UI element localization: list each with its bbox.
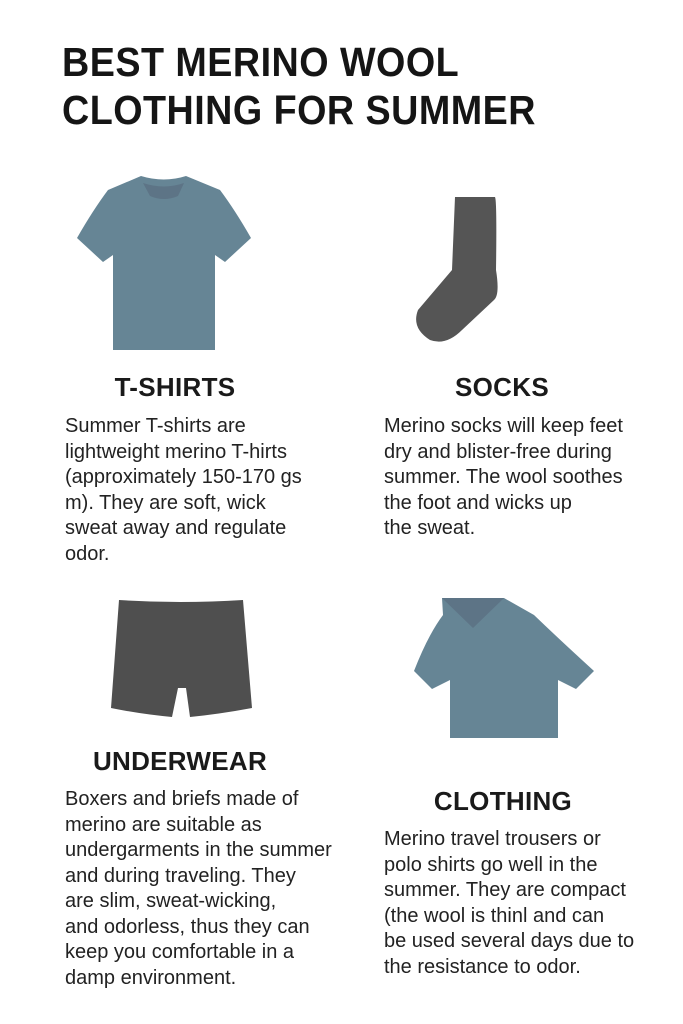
text: t-shirts: Summer T-shirts are: [65, 415, 246, 437]
text: t-shirts: m). They are soft, wick: [65, 492, 266, 514]
text: clothing: [384, 828, 634, 978]
text: socks: dry and blister-free during: [384, 440, 612, 462]
title: BEST MERINO WOOL: [62, 39, 459, 85]
heading: clothing: CLOTHING: [434, 786, 572, 816]
text: t-shirts: sweat away and regulate: [65, 517, 286, 539]
text: clothing: summer. They are compact: [384, 879, 626, 901]
icon: underwear: [111, 600, 252, 717]
text: underwear: undergarments in the summer: [65, 839, 332, 861]
text: clothing: polo shirts go well in the: [384, 854, 597, 876]
heading: t-shirts: T-SHIRTS: [115, 372, 235, 402]
text: socks: summer. The wool soothes: [384, 466, 623, 488]
text: socks: the foot and wicks up: [384, 492, 572, 514]
text: t-shirts: lightweight merino T-hirts: [65, 440, 287, 462]
text: underwear: [65, 788, 332, 988]
text: t-shirts: (approximately 150-170 gs: [65, 466, 302, 488]
text: clothing: Merino travel trousers or: [384, 828, 601, 850]
text: clothing: the resistance to odor.: [384, 956, 581, 978]
text: underwear: keep you comfortable in a: [65, 941, 294, 963]
title: [62, 39, 536, 133]
icon: v-neck shirt: [414, 598, 594, 738]
heading: socks: SOCKS: [455, 372, 549, 402]
text: socks: [384, 415, 623, 539]
text: clothing: be used several days due to: [384, 930, 634, 952]
icon: t-shirt: [77, 176, 251, 350]
heading: underwear: UNDERWEAR: [93, 746, 267, 776]
text: underwear: damp environment.: [65, 966, 236, 988]
icon: sock: [416, 197, 498, 342]
text: socks: Merino socks will keep feet: [384, 415, 623, 437]
text: underwear: and during traveling. They: [65, 864, 296, 886]
text: socks: the sweat.: [384, 517, 475, 539]
text: underwear: and odorless, thus they can: [65, 916, 310, 938]
text: clothing: (the wool is thinl and can: [384, 904, 604, 926]
text: underwear: are slim, sweat-wicking,: [65, 890, 276, 912]
text: t-shirts: [65, 415, 302, 564]
text: underwear: merino are suitable as: [65, 814, 262, 836]
text: underwear: Boxers and briefs made of: [65, 788, 298, 810]
text: t-shirts: odor.: [65, 542, 109, 564]
title: CLOTHING FOR SUMMER: [62, 87, 536, 133]
